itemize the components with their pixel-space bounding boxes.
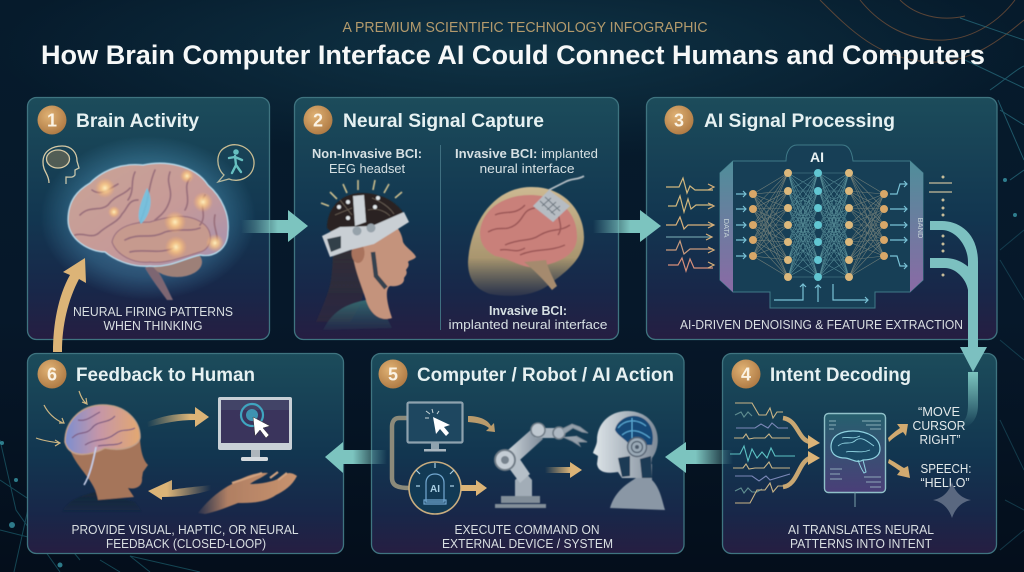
- arrow: step 3 to 4: [930, 221, 987, 428]
- icon: monitor with cursor: [408, 402, 462, 452]
- icon: monitor with cursor: [218, 397, 292, 461]
- illustration: woman with EEG headset: [316, 180, 416, 330]
- arrows out of decoder: [888, 424, 910, 478]
- badge 3: [664, 106, 694, 134]
- illustration: skull with implant: [468, 176, 584, 296]
- caption 2: implanted neural interface: [448, 318, 608, 332]
- arrow: AI to robot: [461, 480, 487, 496]
- arrow: step 6 back to 1: [53, 258, 86, 352]
- panel 6: feedback to human: [28, 354, 344, 554]
- network connections: [753, 173, 884, 277]
- badge 1: 1: [47, 110, 57, 130]
- decoded text: CURSOR: [912, 418, 966, 433]
- heading 5: Computer / Robot / AI Action: [417, 365, 674, 386]
- caption 2: [448, 304, 608, 332]
- text: non-invasive label: EEG headset: [329, 162, 406, 176]
- inner arrows: [736, 181, 907, 303]
- output markers: [929, 176, 952, 276]
- caption 2: Invasive BCI:: [489, 304, 567, 318]
- badge 3: 3: [674, 110, 684, 130]
- badge 6: 6: [47, 364, 57, 384]
- caption 3: AI-DRIVEN DENOISING & FEATURE EXTRACTION: [680, 318, 963, 332]
- eyebrow subtitle: A PREMIUM SCIENTIFIC TECHNOLOGY INFOGRAPHIC: [342, 20, 708, 36]
- badge 6: [38, 360, 66, 388]
- badge 2: 2: [313, 110, 323, 130]
- illustration: android head: [593, 411, 665, 510]
- neural network chip frame: [720, 145, 925, 308]
- arrow: step 5 to 6: [325, 442, 387, 473]
- badge 5: 5: [388, 364, 398, 384]
- arrow: step 2 to 3: [593, 210, 661, 242]
- badge 1: [38, 106, 66, 134]
- side labels: [722, 218, 925, 239]
- arrow to monitor: [147, 407, 209, 427]
- arrow: step 4 to 5: [665, 442, 733, 473]
- arrow to head: [148, 480, 211, 500]
- decorative sparkle: [933, 482, 971, 518]
- decoded text: “MOVE: [918, 404, 960, 419]
- illustration: human head with brain: [62, 405, 148, 512]
- decoded text: SPEECH:: [920, 461, 972, 476]
- caption 6: FEEDBACK (CLOSED-LOOP): [106, 537, 266, 551]
- input signal waves: [666, 178, 714, 271]
- caption 6: PROVIDE VISUAL, HAPTIC, OR NEURAL: [72, 523, 299, 537]
- neural signal traces: [730, 403, 795, 503]
- decoded text: RIGHT”: [920, 432, 960, 447]
- heading 2: Neural Signal Capture: [343, 111, 544, 132]
- panel 3: AI signal processing: [646, 98, 997, 340]
- arrow: robot to android: [545, 462, 582, 478]
- caption 6: [72, 523, 299, 551]
- decoded text: [912, 404, 972, 490]
- heading 1: Brain Activity: [76, 111, 199, 132]
- badge 4: [732, 360, 760, 388]
- heading 6: Feedback to Human: [76, 365, 255, 386]
- caption 1: [73, 305, 233, 333]
- caption 5: EXECUTE COMMAND ON: [454, 523, 600, 537]
- decoded text: “HELLO”: [920, 475, 970, 490]
- caption 1: NEURAL FIRING PATTERNS: [73, 305, 233, 319]
- side labels: BAND: [916, 218, 925, 239]
- panel 1: brain activity: [28, 98, 270, 340]
- caption 5: [442, 523, 613, 551]
- decoder tablet with brain: [824, 414, 886, 507]
- text: invasive label: Invasive BCI: implanted: [455, 147, 598, 161]
- illustration: open hand: [198, 472, 297, 514]
- caption 4: PATTERNS INTO INTENT: [790, 537, 932, 551]
- small incoming arrows: [36, 391, 87, 446]
- panel 5: computer robot AI action: [372, 354, 684, 554]
- illustration: robot arm: [495, 423, 588, 508]
- caption 4: [788, 523, 934, 551]
- arrow: step 1 to 2: [241, 210, 308, 242]
- loop connector: [392, 418, 410, 488]
- badge 4: 4: [741, 364, 751, 384]
- title: How Brain Computer Interface AI Could Connect Humans and Computers: [41, 40, 985, 70]
- icon: AI alert circle: [409, 462, 461, 514]
- text: non-invasive label: [312, 147, 422, 176]
- arrow: monitor to robot: [468, 416, 495, 432]
- text: invasive label: [455, 147, 598, 176]
- arrows into decoder: [783, 418, 820, 487]
- panel 2: neural signal capture: [294, 98, 618, 340]
- heading 4: Intent Decoding: [770, 365, 911, 386]
- side labels: DATA: [722, 219, 731, 237]
- caption 1: WHEN THINKING: [104, 319, 202, 333]
- badge 5: [378, 360, 408, 388]
- heading 3: AI Signal Processing: [704, 111, 895, 132]
- illustration: glowing brain: [40, 136, 256, 300]
- network nodes: [753, 173, 884, 277]
- caption 4: AI TRANSLATES NEURAL: [788, 523, 934, 537]
- icon: activity speech bubble: [218, 145, 254, 182]
- caption 5: EXTERNAL DEVICE / SYSTEM: [442, 537, 613, 551]
- label: AI: AI: [810, 149, 824, 165]
- text: non-invasive label: Non-Invasive BCI:: [312, 147, 422, 161]
- icon: head with brain: [43, 146, 79, 184]
- icon: AI alert circle: AI: [430, 484, 440, 495]
- text: invasive label: neural interface: [480, 162, 575, 176]
- panel 4: intent decoding: [722, 354, 996, 554]
- badge 2: [304, 106, 332, 134]
